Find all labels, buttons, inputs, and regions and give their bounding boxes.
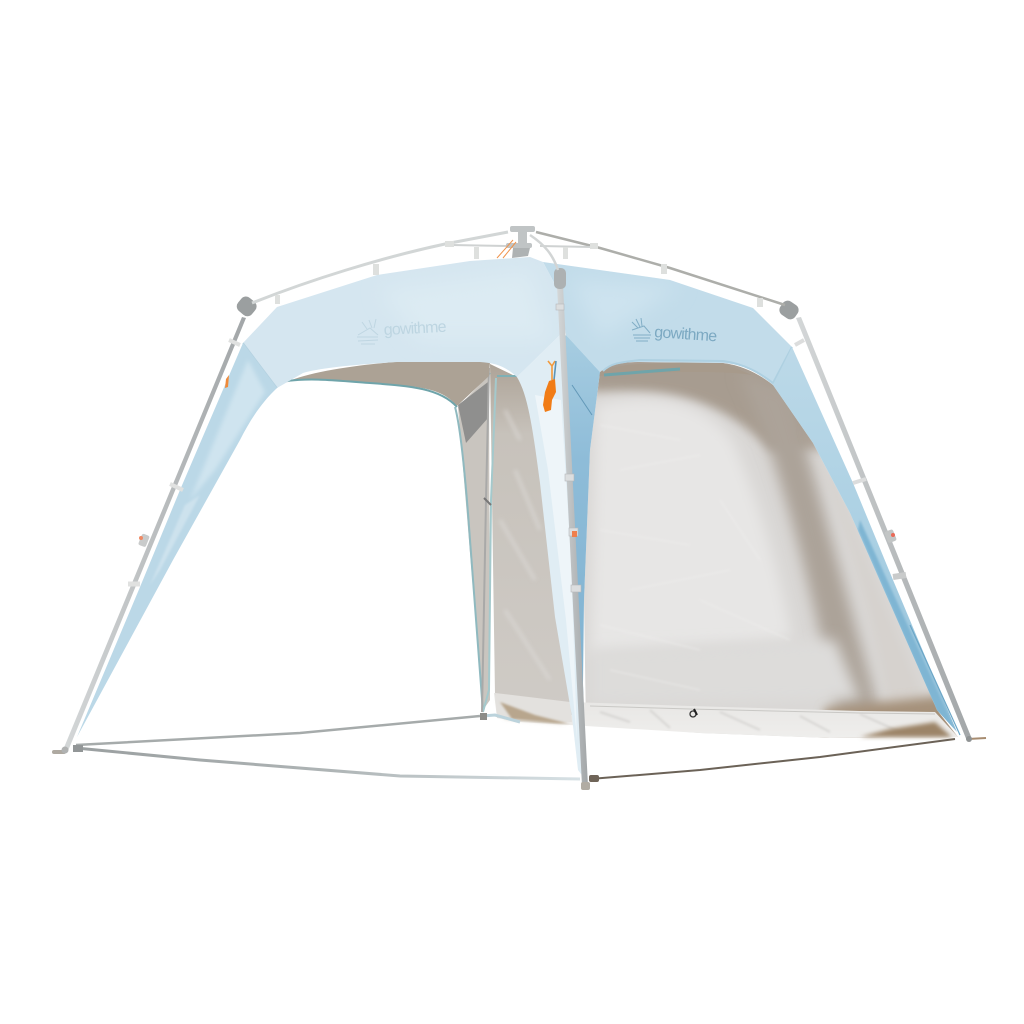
- logo: right gowithme: [632, 318, 718, 345]
- shelter illustration: [52, 226, 986, 790]
- panel: underside of left roof: [285, 360, 490, 407]
- panel: right leg: [773, 347, 960, 735]
- sleeve: pole joints: [556, 304, 581, 592]
- logo: left gowithme: gowithme: [383, 319, 447, 339]
- icon: hem grommet: [690, 709, 697, 717]
- panel: back silver wall: [584, 355, 960, 740]
- logo: right gowithme: gowithme: [654, 324, 718, 345]
- strap: front right ground strap: [589, 739, 955, 782]
- grey end cap: [554, 268, 566, 289]
- grey joint: [234, 294, 259, 319]
- icon: orange tab: [225, 375, 229, 388]
- panel: underside of right roof: [598, 363, 752, 376]
- panel: right roof: [543, 262, 792, 385]
- clips: [275, 241, 763, 307]
- strap: rear left ground strap: [76, 713, 520, 745]
- hub: [506, 226, 535, 258]
- frame: top roof arms and hub: [252, 226, 785, 307]
- strap: front left ground strap: [73, 745, 580, 779]
- mesh window: [458, 382, 488, 443]
- panel: bottom silver hem: [494, 693, 958, 738]
- panel: center leg blue side: [560, 335, 600, 755]
- frame: center front pole: [554, 268, 590, 790]
- panel: left leg: [77, 343, 277, 737]
- panel: left roof: [243, 257, 563, 388]
- panel: interior side wall: [490, 364, 572, 724]
- frame: right pole: [777, 298, 986, 742]
- icon: orange toggle: [543, 361, 556, 412]
- logo: left gowithme: [357, 319, 447, 344]
- panel: center leg white front: [517, 332, 584, 778]
- frame: left pole: [52, 294, 259, 754]
- panel: door side panel: [455, 368, 517, 712]
